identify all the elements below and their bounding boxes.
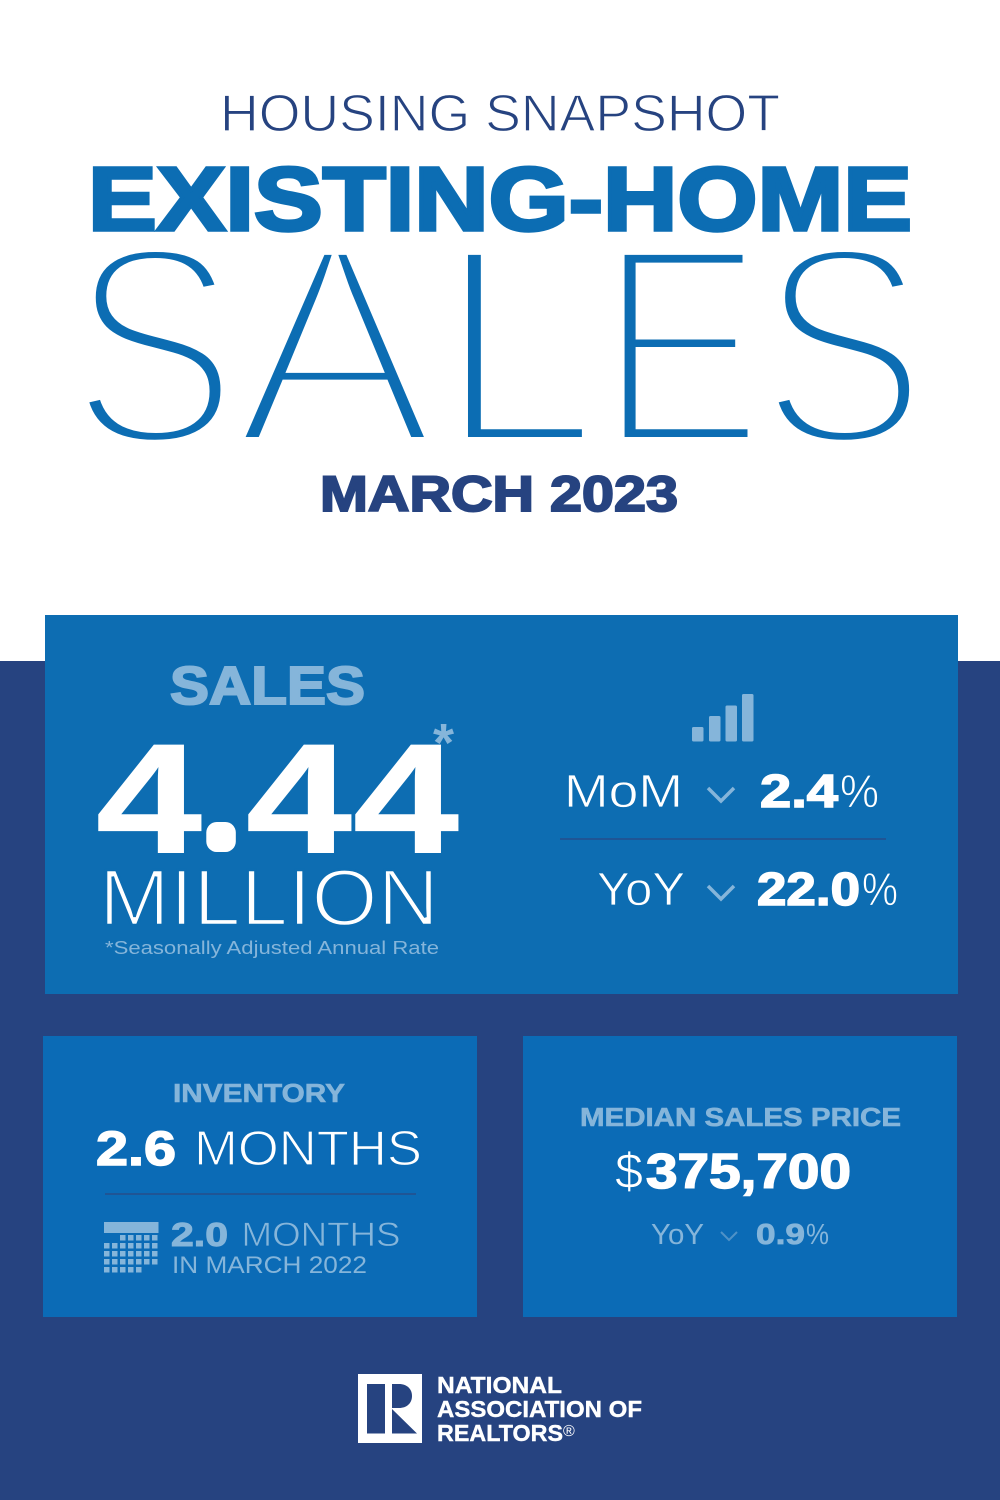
- icon: down chevron: [708, 788, 734, 801]
- previous year value: [171, 1216, 400, 1279]
- value: price: 375,700: [646, 1145, 851, 1199]
- previous year value: MONTHS: [242, 1216, 400, 1254]
- wordmark: [437, 1372, 642, 1446]
- panel: sales: [45, 615, 958, 994]
- value: 4.44: .: [213, 788, 229, 854]
- label: median sales price: MEDIAN SALES PRICE: [580, 1102, 901, 1132]
- panel: median sales price: [523, 1036, 957, 1317]
- heading: sales: A: [234, 187, 437, 505]
- heading: housing snapshot: HOUSING SNAPSHOT: [220, 85, 780, 143]
- wordmark: ASSOCIATION OF: [437, 1396, 642, 1422]
- year over year: %: [862, 863, 898, 915]
- heading: sales: [70, 186, 927, 505]
- value: price: $: [615, 1143, 643, 1199]
- heading: date: MARCH 2023: [320, 466, 678, 522]
- year over year: 0.9: [756, 1219, 805, 1251]
- value: 2.6 months: MONTHS: [194, 1122, 422, 1176]
- previous year value: 2.0: [171, 1216, 228, 1253]
- month over month: 2.4: [760, 765, 839, 817]
- asterisk: *: [433, 713, 454, 773]
- wordmark: ®: [563, 1423, 575, 1440]
- heading: sales: L: [437, 187, 599, 505]
- footnote: *Seasonally Adjusted Annual Rate: [105, 938, 439, 958]
- year over year: [597, 863, 898, 915]
- value: 4.44: 4: [96, 711, 202, 886]
- year over year: 22.0: [757, 863, 860, 915]
- month over month: [564, 765, 879, 817]
- year over year: YoY: [597, 863, 685, 915]
- label: inventory: INVENTORY: [173, 1078, 345, 1108]
- value: 4.44: [96, 711, 459, 886]
- year over year: %: [806, 1219, 829, 1251]
- value: 2.6 months: 2.6: [96, 1123, 176, 1176]
- month over month: MoM: [564, 765, 683, 817]
- wordmark: REALTORS: [437, 1420, 563, 1446]
- label: million: MILLION: [99, 853, 439, 942]
- year over year: YoY: [651, 1219, 704, 1251]
- icon: down chevron: [708, 886, 734, 899]
- icon: down chevron: [721, 1232, 737, 1240]
- value: 4.44: 4: [353, 711, 459, 886]
- label: sales: SALES: [170, 656, 365, 716]
- icon: realtor block R: [358, 1374, 422, 1443]
- logo: national association of realtors: [358, 1372, 642, 1446]
- heading: sales: E: [598, 186, 764, 505]
- previous year value: IN MARCH 2022: [172, 1252, 367, 1279]
- year over year: [651, 1219, 829, 1251]
- heading: existing-home: EXISTING-HOME: [88, 150, 912, 250]
- heading: sales: S: [760, 186, 927, 505]
- month over month: %: [840, 765, 879, 817]
- wordmark: NATIONAL: [437, 1372, 562, 1398]
- heading: sales: S: [70, 187, 238, 505]
- icon: calendar: [104, 1222, 158, 1272]
- title block: [70, 85, 927, 522]
- value: 2.6 months: [96, 1122, 422, 1176]
- panel: inventory: [43, 1036, 477, 1317]
- value: 4.44: 4: [246, 711, 352, 886]
- icon: bars: [692, 694, 754, 742]
